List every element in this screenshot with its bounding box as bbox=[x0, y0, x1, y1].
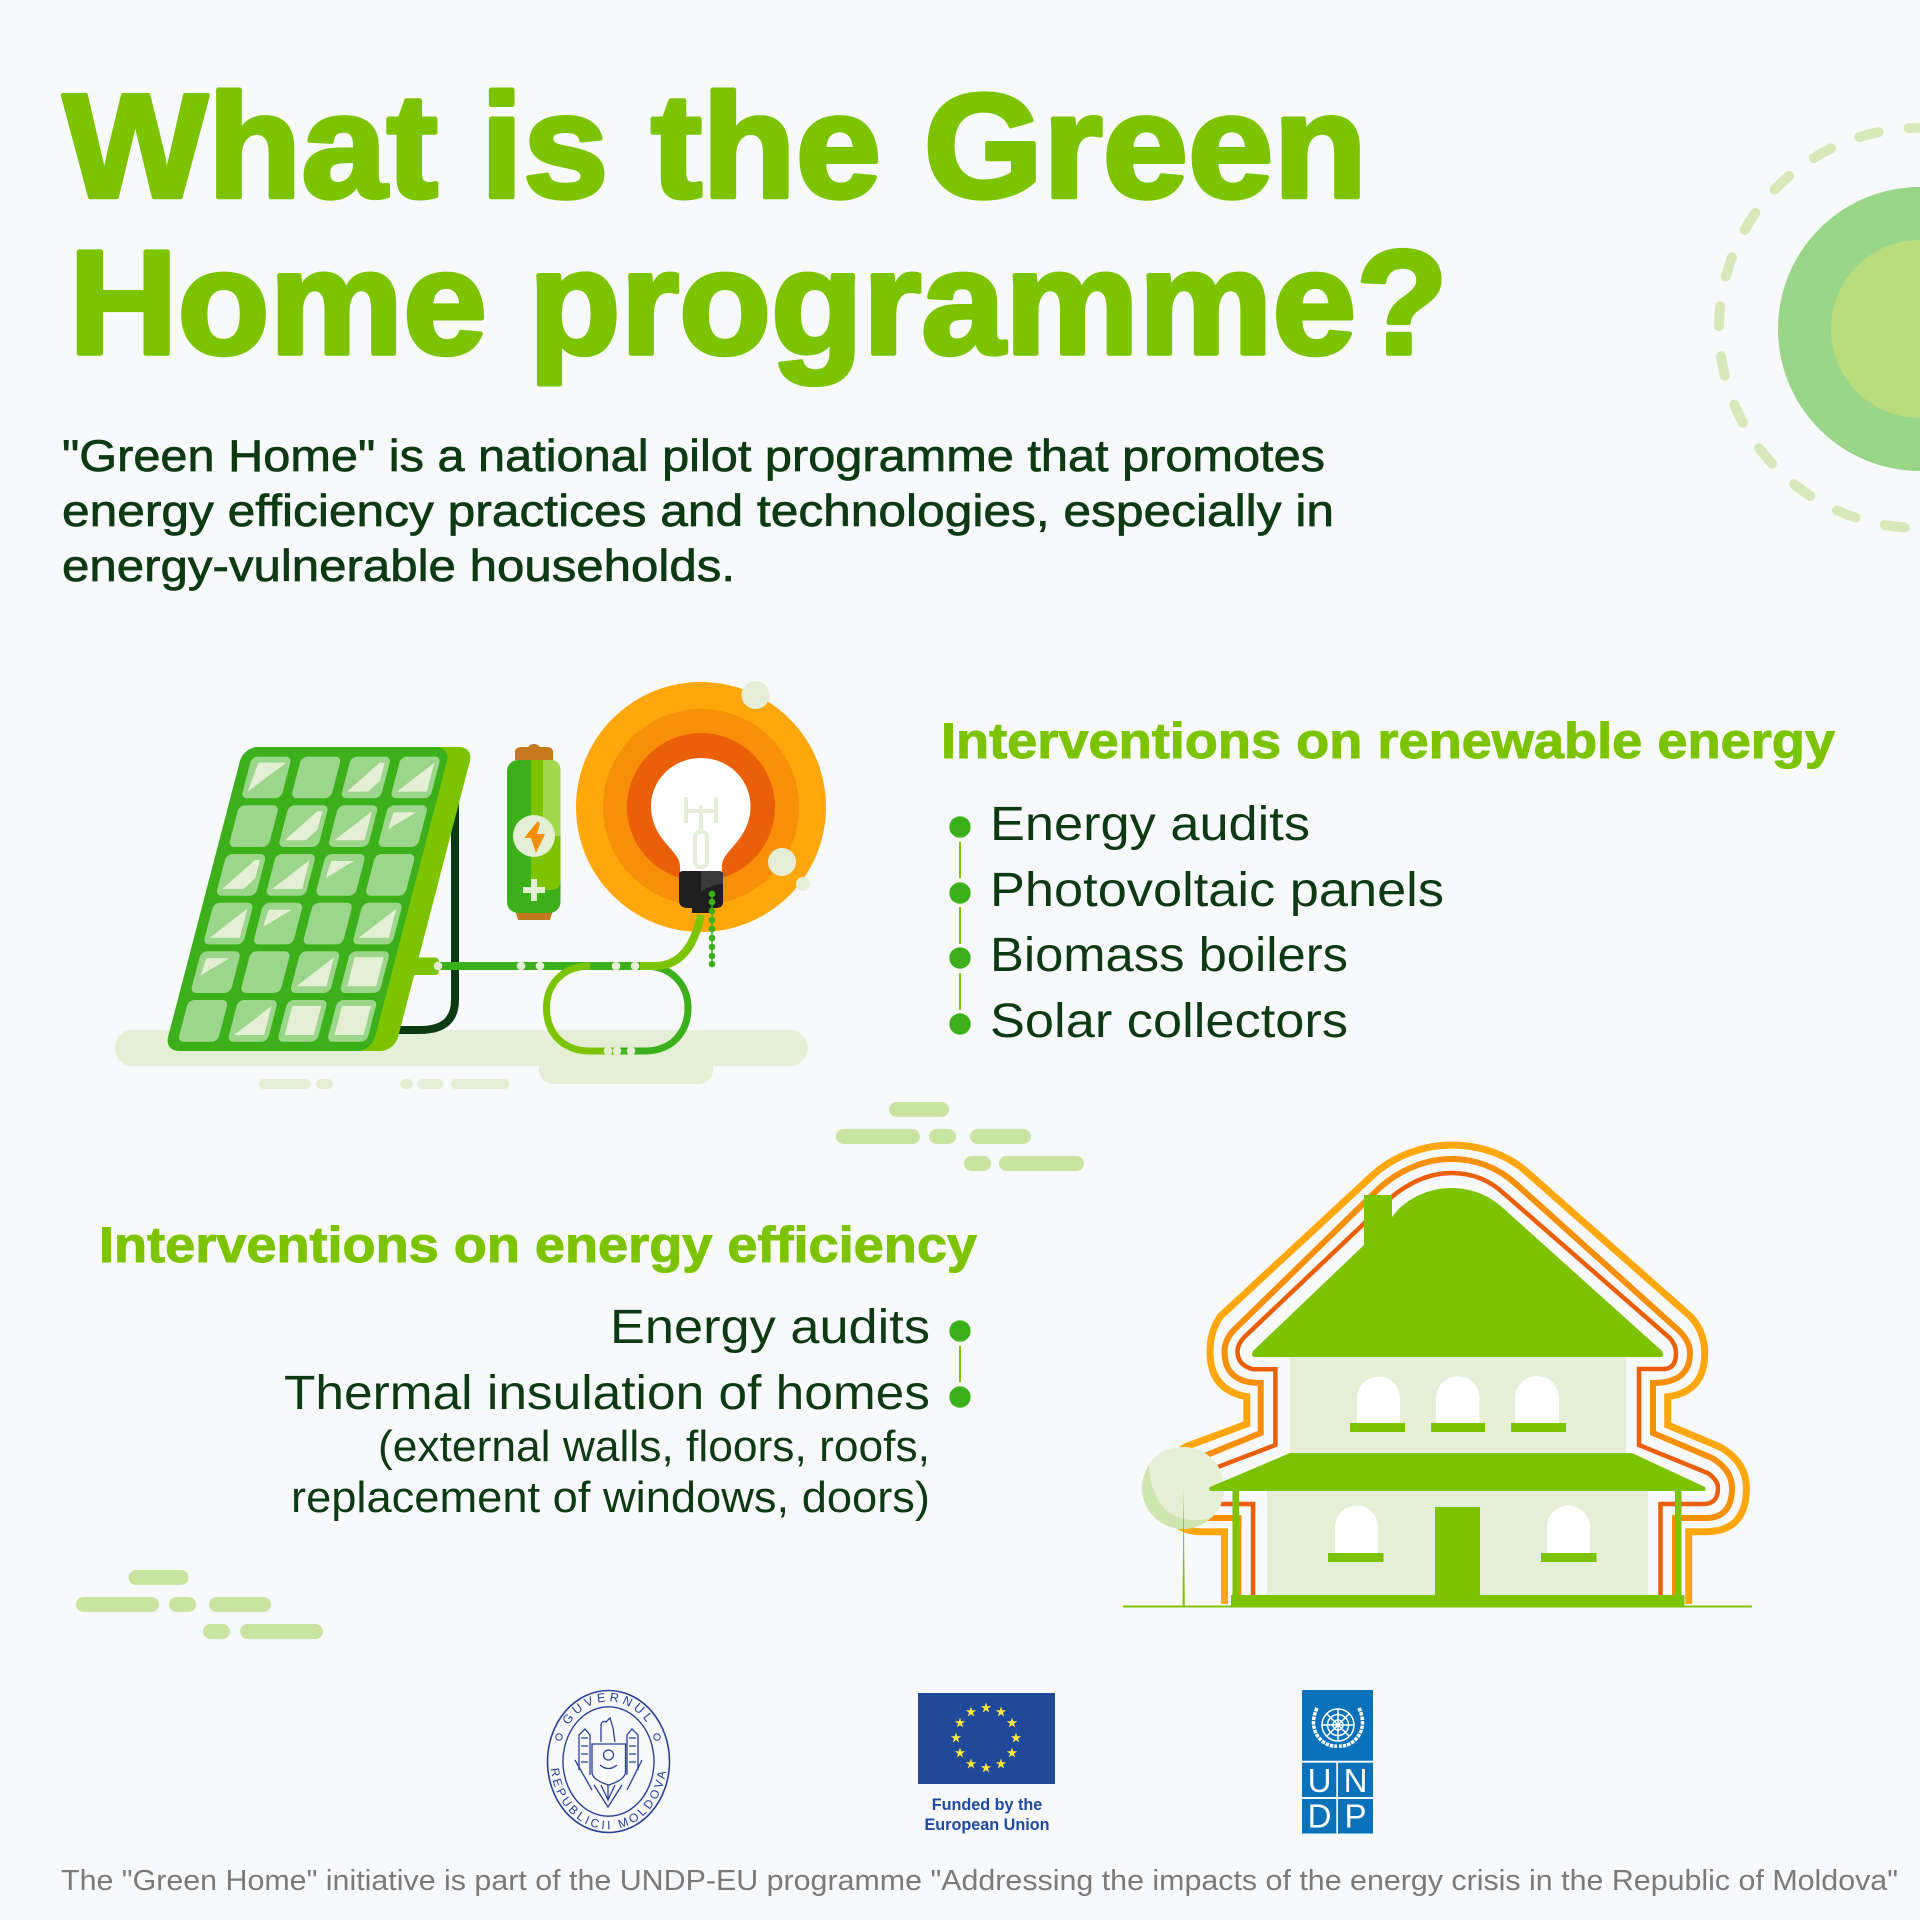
caption: funded by EU: European Union bbox=[924, 1816, 1050, 1834]
decorative dashes upper bbox=[836, 1102, 1084, 1171]
title bbox=[63, 64, 1448, 386]
windows bbox=[1335, 1376, 1590, 1553]
illustration: solar panel, battery and bulb bbox=[114, 681, 826, 1089]
lower wall bbox=[1267, 1491, 1648, 1597]
illustration: insulated house bbox=[1123, 1145, 1752, 1607]
logo: Government of Moldova seal: REPUBLICII MOLDOVA bbox=[550, 1768, 666, 1830]
floating bubbles bbox=[742, 681, 810, 891]
logo: UNDP: N bbox=[1344, 1762, 1367, 1799]
intro paragraph: energy efficiency practices and technologies, especially in bbox=[62, 487, 1334, 536]
panel stand bbox=[396, 803, 455, 1030]
list: energy efficiency: (external walls, floors, roofs, bbox=[378, 1422, 930, 1471]
footer note: The "Green Home" initiative is part of the UNDP-EU programme "Addressing the impacts of the energy crisis in the Republic of Moldova" bbox=[61, 1865, 1898, 1897]
list: renewable energy: Photovoltaic panels bbox=[990, 864, 1444, 917]
list: energy efficiency: Thermal insulation of homes bbox=[284, 1367, 930, 1420]
light bulb bbox=[651, 758, 750, 967]
tree bbox=[1142, 1447, 1224, 1606]
heading: renewable energy: Interventions on renewable energy bbox=[941, 713, 1835, 769]
logo: UNDP: U bbox=[1308, 1762, 1331, 1799]
list: energy efficiency: Energy audits bbox=[610, 1301, 930, 1354]
logo: Government of Moldova seal: GUVERNUL bbox=[563, 1692, 651, 1724]
logo: UNDP: P bbox=[1344, 1798, 1367, 1834]
logo: Government of Moldova seal bbox=[546, 1690, 670, 1834]
list: renewable energy bbox=[949, 798, 1444, 1048]
title: What is the Green bbox=[63, 64, 1367, 229]
title: Home programme? bbox=[69, 220, 1448, 386]
caption: funded by EU bbox=[924, 1796, 1050, 1834]
ground line bbox=[1123, 1606, 1752, 1608]
list: renewable energy: Solar collectors bbox=[990, 995, 1348, 1048]
caption: funded by EU: Funded by the bbox=[932, 1796, 1042, 1814]
logo: UNDP bbox=[1302, 1690, 1373, 1834]
intro paragraph: "Green Home" is a national pilot programme that promotes bbox=[62, 432, 1325, 481]
insulation lines bbox=[1160, 1145, 1746, 1604]
logo: UNDP: D bbox=[1308, 1798, 1331, 1834]
list: energy efficiency bbox=[284, 1301, 971, 1522]
decorative dashes lower bbox=[76, 1570, 323, 1639]
list: renewable energy: Energy audits bbox=[990, 798, 1310, 851]
ground shadow bbox=[114, 1030, 808, 1089]
columns bbox=[1232, 1489, 1682, 1597]
intro paragraph bbox=[62, 432, 1334, 591]
decorative sun top right bbox=[1719, 128, 1920, 528]
lower roof bbox=[1209, 1453, 1706, 1491]
base bbox=[1231, 1595, 1684, 1607]
heading: energy efficiency: Interventions on energy efficiency bbox=[99, 1217, 977, 1273]
intro paragraph: energy-vulnerable households. bbox=[62, 542, 735, 591]
list: renewable energy: Biomass boilers bbox=[990, 929, 1348, 982]
logo: EU flag bbox=[918, 1693, 1055, 1784]
upper wall bbox=[1290, 1355, 1626, 1455]
wires bbox=[404, 915, 701, 1051]
sun behind bulb bbox=[576, 682, 826, 932]
list: energy efficiency: replacement of windows, doors) bbox=[291, 1473, 930, 1522]
main roof and chimney bbox=[1252, 1188, 1663, 1357]
solar panel bbox=[164, 747, 474, 1051]
window sills bbox=[1328, 1423, 1596, 1562]
battery bbox=[507, 744, 560, 920]
door bbox=[1435, 1507, 1480, 1597]
